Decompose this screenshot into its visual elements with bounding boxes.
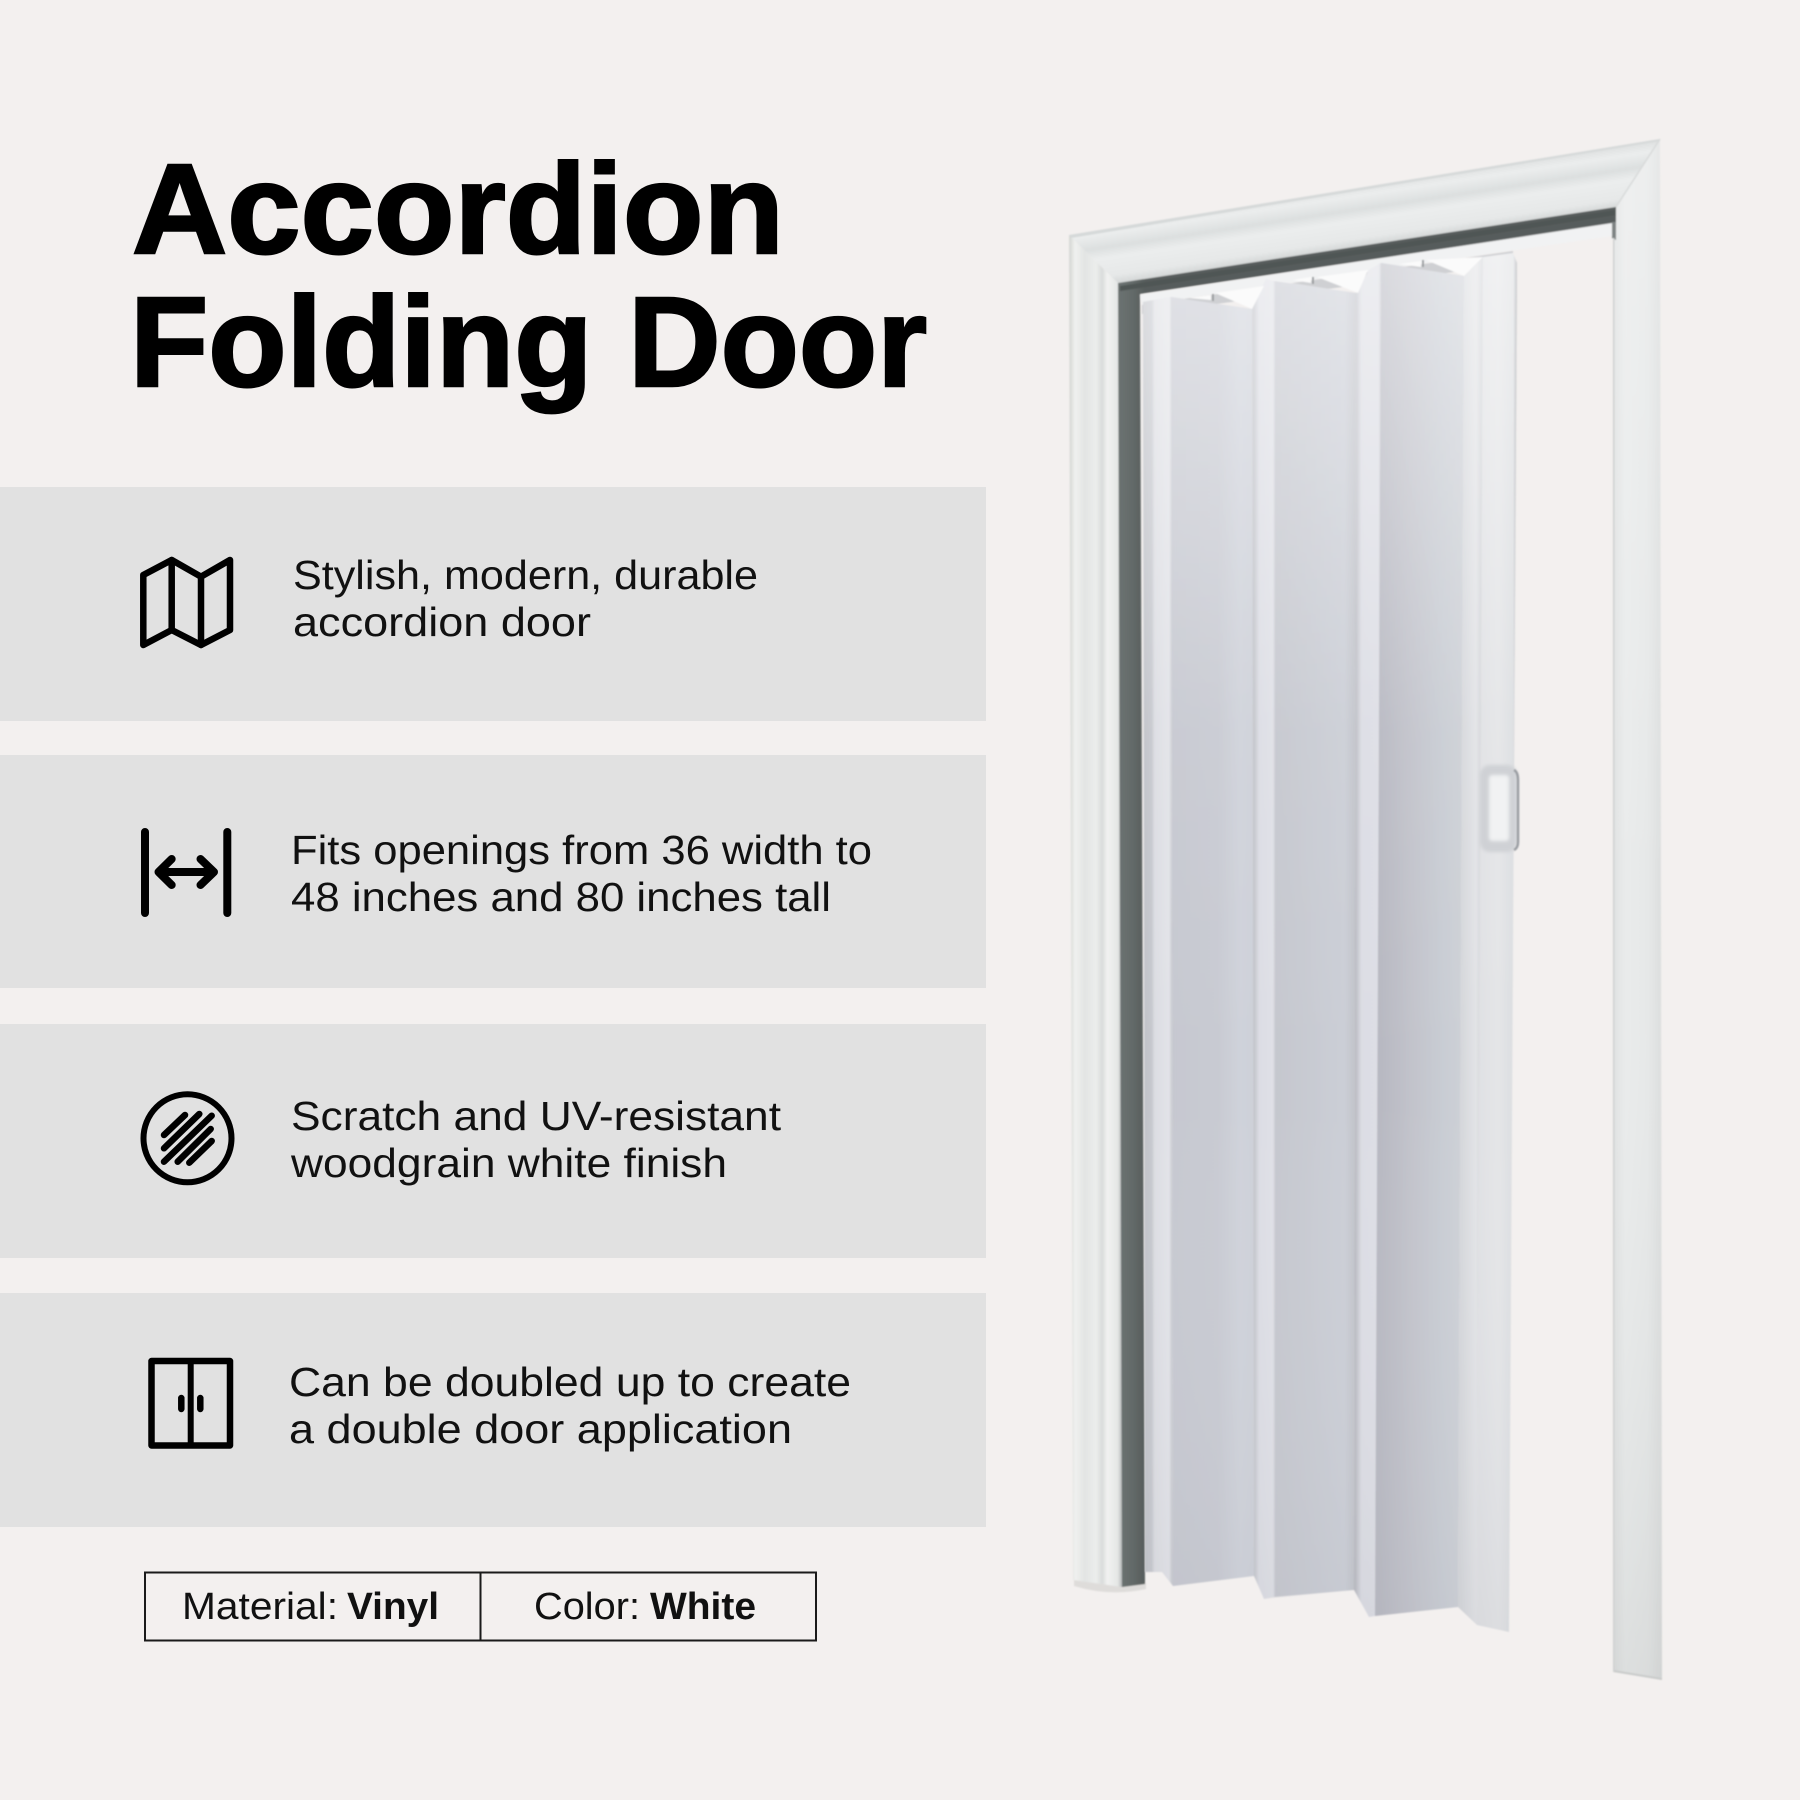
door handle — [1480, 765, 1518, 852]
feature text: finish: Scratch and UV-resistant — [291, 1093, 782, 1139]
feature text: dimensions — [291, 827, 872, 920]
feature text: dimensions: 48 inches and 80 inches tall — [291, 874, 831, 920]
feature text: dimensions: Fits openings from 36 width to — [291, 827, 872, 873]
title: Accordion — [132, 138, 784, 281]
feature text: double door — [289, 1359, 851, 1452]
door panels — [1142, 251, 1518, 1632]
feature text: double door: Can be doubled up to create — [289, 1359, 851, 1405]
panel: double door feature — [0, 1293, 986, 1527]
icon: width arrows — [145, 832, 227, 913]
title: Folding Door — [130, 271, 927, 414]
panel: finish feature — [0, 1024, 986, 1258]
door illustration — [1069, 139, 1662, 1680]
title — [130, 138, 927, 414]
feature text: finish: woodgrain white finish — [290, 1140, 727, 1186]
panel: stylish door feature — [0, 487, 986, 721]
color spec — [534, 1586, 756, 1628]
feature text: finish — [290, 1093, 782, 1186]
feature text: stylish: accordion door — [293, 599, 591, 645]
spec table — [145, 1572, 816, 1640]
panel: dimensions feature — [0, 755, 986, 988]
material spec: Material: — [182, 1586, 338, 1628]
door frame — [1069, 139, 1662, 1680]
hardware gaps at the top of the door — [1189, 257, 1483, 309]
feature text: stylish — [293, 552, 758, 645]
color spec: White — [650, 1586, 756, 1628]
feature text: double door: a double door application — [289, 1406, 792, 1452]
icon: folded map — [143, 560, 230, 645]
material spec — [182, 1586, 439, 1628]
feature text: stylish: Stylish, modern, durable — [293, 552, 758, 598]
color spec: Color: — [534, 1586, 640, 1628]
icon: double door — [152, 1361, 230, 1446]
icon: woodgrain circle — [144, 1094, 232, 1182]
material spec: Vinyl — [347, 1586, 439, 1628]
